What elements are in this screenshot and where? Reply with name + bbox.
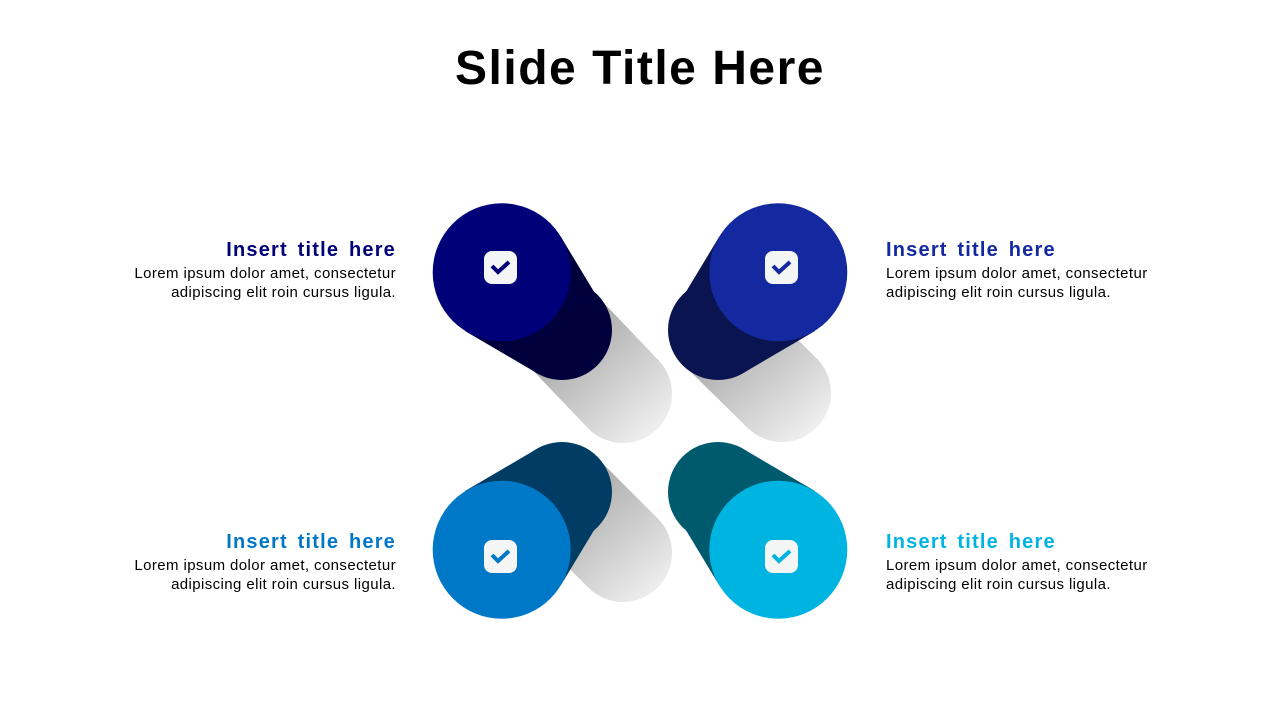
text: item 2: adipiscing elit roin cursus ligula. — [886, 284, 1111, 301]
shadow: bottom-left — [562, 492, 623, 553]
text: item 1: adipiscing elit roin cursus ligula. — [171, 284, 396, 301]
shadow: top-left — [562, 330, 623, 394]
item 4 cylinder — [668, 442, 847, 619]
text: item 3: adipiscing elit roin cursus ligula. — [171, 576, 396, 593]
item 3 cylinder — [433, 442, 612, 619]
item 2 cylinder — [668, 203, 847, 380]
text: item 4 — [886, 531, 1148, 593]
text: item 1: Insert title here — [226, 239, 396, 261]
text: item 3: Insert title here — [226, 531, 396, 553]
text: item 2: Insert title here — [886, 239, 1056, 261]
text: item 1: Lorem ipsum dolor amet, consectetur — [134, 265, 396, 282]
text: item 1 — [134, 239, 396, 301]
shadow: top-right — [718, 330, 782, 393]
text: item 4: Lorem ipsum dolor amet, consectetur — [886, 557, 1148, 574]
text: item 3 — [134, 531, 396, 593]
text: item 3: Lorem ipsum dolor amet, consectetur — [134, 557, 396, 574]
text: item 2 — [886, 239, 1148, 301]
title: Slide Title Here — [455, 42, 825, 95]
text: item 4: adipiscing elit roin cursus ligula. — [886, 576, 1111, 593]
text: item 4: Insert title here — [886, 531, 1056, 553]
text: item 2: Lorem ipsum dolor amet, consectetur — [886, 265, 1148, 282]
item 1 cylinder — [433, 203, 612, 380]
